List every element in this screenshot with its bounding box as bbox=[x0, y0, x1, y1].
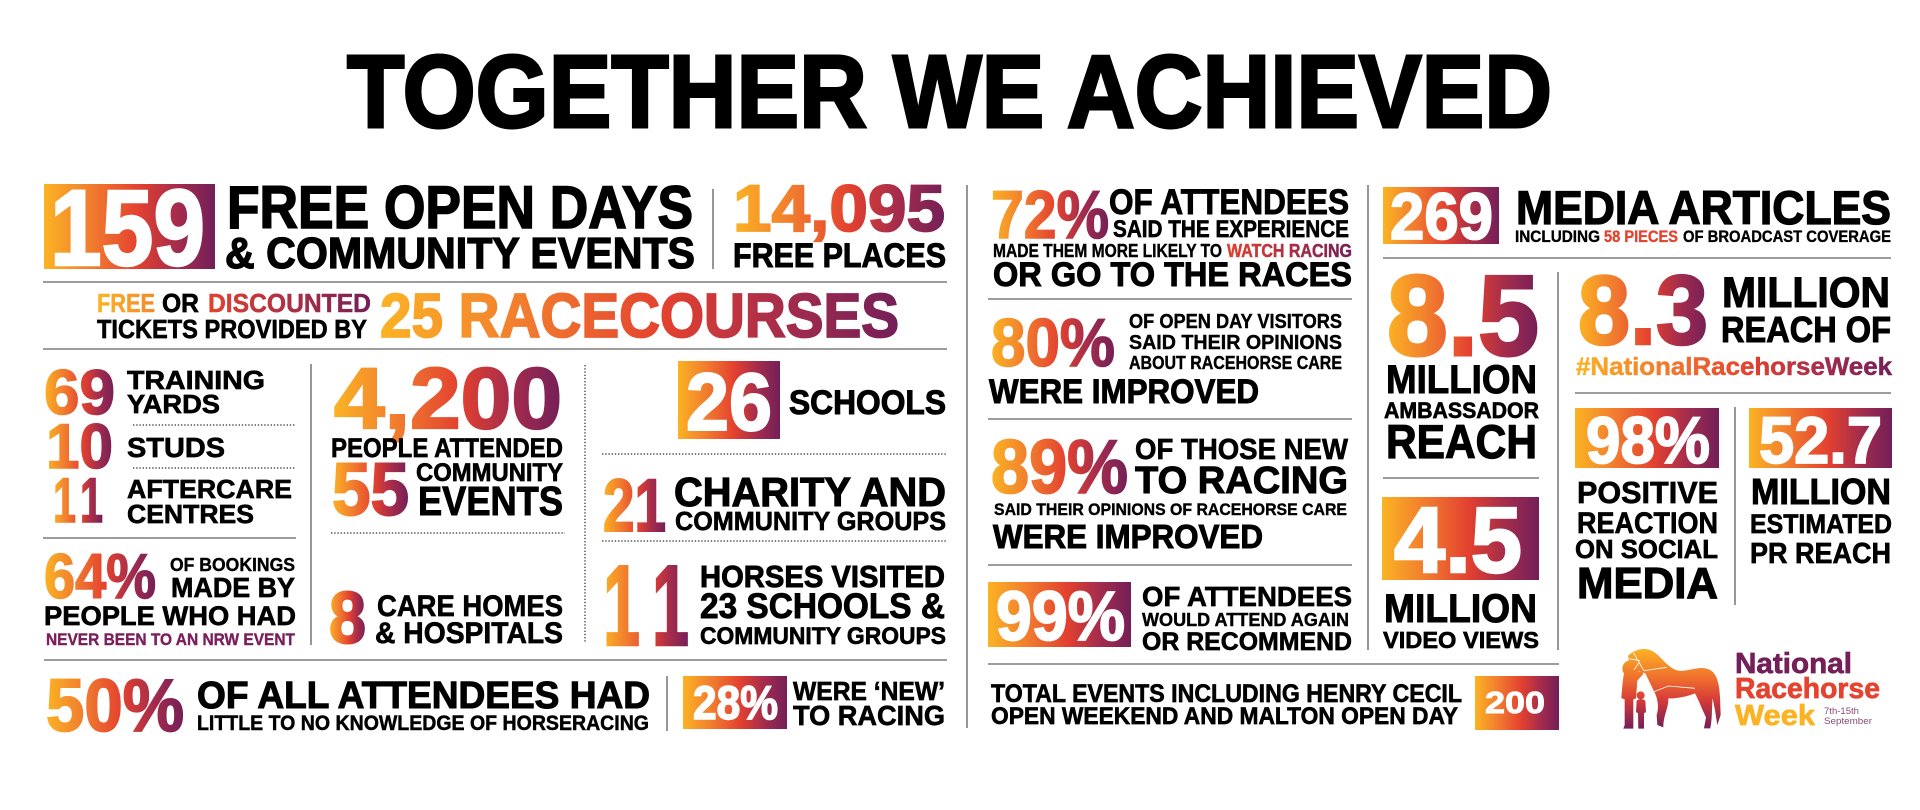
stat: 69 training yards: TRAINING bbox=[127, 365, 265, 395]
stat: 11 aftercare centres bbox=[53, 466, 292, 536]
text: of attendees said the experience bbox=[1109, 183, 1349, 243]
stat: 50%: 50% bbox=[46, 664, 184, 747]
text: broadcast coverage: OF BROADCAST COVERAGE bbox=[1683, 228, 1891, 246]
label: positive reaction on social media: REACTION bbox=[1577, 507, 1718, 540]
stat: 55 community events bbox=[332, 448, 563, 531]
label: million ambassador reach bbox=[1384, 358, 1539, 468]
label: million video views: MILLION bbox=[1384, 587, 1537, 631]
text: of those new to racing bbox=[1135, 434, 1349, 502]
label: free or discounted: OR bbox=[162, 288, 199, 318]
text: national: National bbox=[1735, 648, 1852, 680]
panel: bookings bbox=[44, 542, 296, 649]
panel: schools bbox=[678, 357, 946, 448]
text: of bookings made by: MADE BY bbox=[171, 572, 295, 603]
text: of those new to racing: TO RACING bbox=[1135, 460, 1348, 502]
text: of attendees said the experience: OF ATTENDEES bbox=[1109, 183, 1349, 222]
text: million reach of: REACH OF bbox=[1721, 309, 1891, 350]
text: broadcast coverage bbox=[1515, 228, 1891, 246]
stat: 8.5: 8.5 bbox=[1387, 253, 1539, 380]
heading: free open days: FREE OPEN DAYS bbox=[227, 174, 693, 241]
label: positive reaction on social media bbox=[1575, 475, 1718, 608]
label: free or discounted: FREE bbox=[97, 288, 155, 318]
stat: 11 horses visited: 1 bbox=[652, 543, 689, 670]
text: broadcast coverage: INCLUDING bbox=[1515, 228, 1600, 246]
label: million video views bbox=[1383, 587, 1539, 653]
stat: 11 aftercare centres: 1 bbox=[53, 466, 76, 536]
label: million estimated pr reach: MILLION bbox=[1751, 471, 1891, 512]
stat: 69 training yards bbox=[44, 358, 265, 428]
stat box: 26: 26 bbox=[686, 357, 772, 448]
text: of bookings made by: OF BOOKINGS bbox=[170, 554, 295, 575]
text: were new to racing: WERE ‘NEW’ bbox=[793, 676, 945, 706]
label: schools: SCHOOLS bbox=[789, 384, 946, 422]
label: free or discounted: DISCOUNTED bbox=[208, 288, 371, 318]
panel: positive reaction bbox=[1575, 403, 1719, 608]
stat: 72%: 72% bbox=[991, 177, 1109, 253]
text: were improved: WERE IMPROVED bbox=[993, 518, 1263, 555]
text: open day visitors opinions bbox=[1129, 311, 1342, 373]
panel: 99% of attendees bbox=[988, 577, 1352, 656]
stat: 11 horses visited: 1 bbox=[603, 543, 640, 670]
stat: 11 horses visited: COMMUNITY GROUPS bbox=[700, 623, 946, 650]
text: total events description: TOTAL EVENTS INCLUDING HENRY CECIL bbox=[991, 680, 1462, 708]
stat: 14,095: 14,095 bbox=[733, 171, 945, 245]
text: million reach of bbox=[1721, 269, 1891, 350]
stat: 80%: 80% bbox=[991, 305, 1115, 381]
text: were improved: WERE IMPROVED bbox=[989, 373, 1259, 411]
stat: 8.3: 8.3 bbox=[1578, 255, 1708, 365]
panel: hashtag reach bbox=[1576, 255, 1892, 381]
text: of bookings made by bbox=[170, 554, 295, 603]
text: total events description: OPEN WEEKEND AND MALTON OPEN DAY bbox=[991, 703, 1458, 730]
label: million ambassador reach: REACH bbox=[1386, 415, 1537, 468]
stat box: 98%: 98% bbox=[1586, 403, 1710, 477]
text: million reach of: MILLION bbox=[1722, 269, 1890, 317]
stat: 55 community events: COMMUNITY bbox=[416, 459, 563, 487]
stat: 69 training yards: 69 bbox=[44, 358, 115, 428]
text: total events description bbox=[991, 680, 1462, 730]
stat box: 28%: 28% bbox=[693, 676, 778, 729]
stat: 8 care homes and hospitals: CARE HOMES bbox=[377, 590, 563, 623]
text: racehorse: Racehorse bbox=[1735, 673, 1880, 705]
stat: 11 horses visited: 23 SCHOOLS & bbox=[700, 587, 945, 626]
stat: 10 studs bbox=[46, 412, 225, 482]
text: dates: September bbox=[1824, 716, 1872, 727]
stat: 11 aftercare centres: AFTERCARE bbox=[127, 474, 292, 504]
stat: 11 horses visited bbox=[603, 543, 946, 670]
text: open day visitors opinions: SAID THEIR OPINIONS bbox=[1129, 332, 1342, 354]
label: tickets provided by: TICKETS PROVIDED BY bbox=[97, 314, 367, 344]
stat box: 52.7: 52.7 bbox=[1759, 403, 1882, 477]
panel: attendee knowledge bbox=[46, 664, 945, 747]
stat: 11 horses visited: HORSES VISITED bbox=[700, 559, 945, 594]
label: million ambassador reach: AMBASSADOR bbox=[1384, 398, 1539, 423]
label: positive reaction on social media: POSITIVE bbox=[1577, 475, 1718, 510]
label: million ambassador reach: MILLION bbox=[1386, 358, 1537, 402]
text: or go to the races: OR GO TO THE RACES bbox=[993, 256, 1352, 294]
stat: 25 racecourses: 25 RACECOURSES bbox=[380, 282, 899, 351]
logo: national racehorse week bbox=[1621, 648, 1880, 732]
heading: community events: & COMMUNITY EVENTS bbox=[225, 229, 695, 278]
text: little to no knowledge: LITTLE TO NO KNOWLEDGE OF HORSERACING bbox=[197, 712, 649, 735]
stat box: 99%: 99% bbox=[996, 577, 1125, 655]
text: people who had: PEOPLE WHO HAD bbox=[44, 601, 296, 631]
text: week: Week bbox=[1735, 700, 1816, 732]
label: positive reaction on social media: ON SOCIAL bbox=[1575, 534, 1718, 564]
text: more likely to watch racing: WATCH RACING bbox=[1227, 240, 1352, 261]
stat: 4,200: 4,200 bbox=[334, 351, 562, 447]
panel: total events bbox=[991, 676, 1559, 730]
panel: pr reach bbox=[1749, 403, 1892, 570]
heading: media articles: MEDIA ARTICLES bbox=[1516, 181, 1891, 234]
stat box: 4.5: 4.5 bbox=[1394, 488, 1522, 592]
text: were new to racing: TO RACING bbox=[793, 700, 945, 731]
stat: 21 charity and community groups: 21 bbox=[603, 464, 666, 547]
text: would attend again or recommend: OF ATTENDEES bbox=[1142, 581, 1352, 612]
stat box: 200 bbox=[1475, 676, 1559, 730]
label: million estimated pr reach bbox=[1750, 471, 1892, 570]
stat box: 200: 200 bbox=[1485, 685, 1545, 720]
stat: 10 studs: 10 bbox=[46, 412, 113, 482]
panel: ambassador reach bbox=[1384, 253, 1539, 468]
panel: free open days bbox=[44, 167, 946, 288]
text: would attend again or recommend: WOULD ATTEND AGAIN bbox=[1142, 609, 1349, 630]
label: free places: FREE PLACES bbox=[733, 237, 946, 275]
panel: video views bbox=[1382, 488, 1539, 653]
text: dates: 7th-15th bbox=[1824, 706, 1859, 717]
text: broadcast coverage: 58 PIECES bbox=[1604, 228, 1678, 246]
panel: racecourses bbox=[97, 282, 899, 351]
stat: 8 care homes and hospitals bbox=[329, 578, 563, 659]
text: more likely to watch racing: MADE THEM MORE LIKELY TO bbox=[993, 240, 1222, 261]
text: of attendees said the experience: SAID THE EXPERIENCE bbox=[1113, 216, 1349, 243]
text: never been to an nrw event: NEVER BEEN TO AN NRW EVENT bbox=[46, 630, 296, 649]
panel: 80% of open day visitors bbox=[989, 305, 1342, 411]
panel: yards studs aftercare bbox=[44, 358, 296, 536]
text: would attend again or recommend: OR RECOMMEND bbox=[1142, 628, 1352, 656]
label: million estimated pr reach: PR REACH bbox=[1750, 538, 1891, 570]
panel: 89% new to racing bbox=[991, 425, 1349, 555]
hashtag: #NationalRacehorseWeek bbox=[1576, 353, 1892, 381]
stat: 21 charity and community groups: CHARITY AND bbox=[674, 469, 946, 515]
text: dates bbox=[1824, 706, 1872, 727]
stat: 11 aftercare centres: CENTRES bbox=[127, 499, 254, 529]
text: would attend again or recommend bbox=[1142, 581, 1352, 656]
stat: 11 aftercare centres: 1 bbox=[80, 466, 103, 536]
text: opinions of racehorse care: SAID THEIR OPINIONS OF RACEHORSE CARE bbox=[994, 500, 1347, 519]
stat: 8 care homes and hospitals: & HOSPITALS bbox=[375, 617, 563, 650]
panel: media articles bbox=[1383, 179, 1891, 253]
text: of those new to racing: OF THOSE NEW bbox=[1135, 434, 1349, 466]
text: were new to racing bbox=[793, 676, 945, 731]
stat: 64%: 64% bbox=[44, 542, 156, 612]
text: of all attendees had: OF ALL ATTENDEES HAD bbox=[197, 675, 650, 717]
stat: 55 community events: 55 bbox=[332, 448, 409, 531]
stat: 8 care homes and hospitals: 8 bbox=[329, 578, 366, 659]
stat: 21 charity and community groups: COMMUNITY GROUPS bbox=[675, 506, 946, 536]
stat box: 269: 269 bbox=[1390, 179, 1493, 253]
text: open day visitors opinions: OF OPEN DAY VISITORS bbox=[1129, 311, 1342, 333]
stat box: 159: 159 bbox=[50, 167, 205, 288]
title: TOGETHER WE ACHIEVED bbox=[347, 34, 1552, 149]
stat: 55 community events: EVENTS bbox=[418, 478, 563, 524]
stat: 69 training yards: YARDS bbox=[127, 389, 220, 419]
label: million video views: VIDEO VIEWS bbox=[1383, 627, 1539, 653]
label: free or discounted bbox=[97, 288, 371, 318]
stat: 21 charity and community groups bbox=[603, 464, 946, 547]
label: positive reaction on social media: MEDIA bbox=[1577, 559, 1718, 608]
panel: people attended bbox=[331, 351, 563, 531]
text: open day visitors opinions: ABOUT RACEHORSE CARE bbox=[1129, 353, 1342, 373]
stat: 89%: 89% bbox=[991, 425, 1128, 510]
label: million estimated pr reach: ESTIMATED bbox=[1750, 509, 1892, 539]
panel: 72% of attendees bbox=[991, 177, 1352, 294]
stat: 10 studs: STUDS bbox=[127, 432, 225, 463]
label: people attended: PEOPLE ATTENDED bbox=[331, 433, 563, 463]
icon: horse with woman and child bbox=[1621, 649, 1721, 729]
